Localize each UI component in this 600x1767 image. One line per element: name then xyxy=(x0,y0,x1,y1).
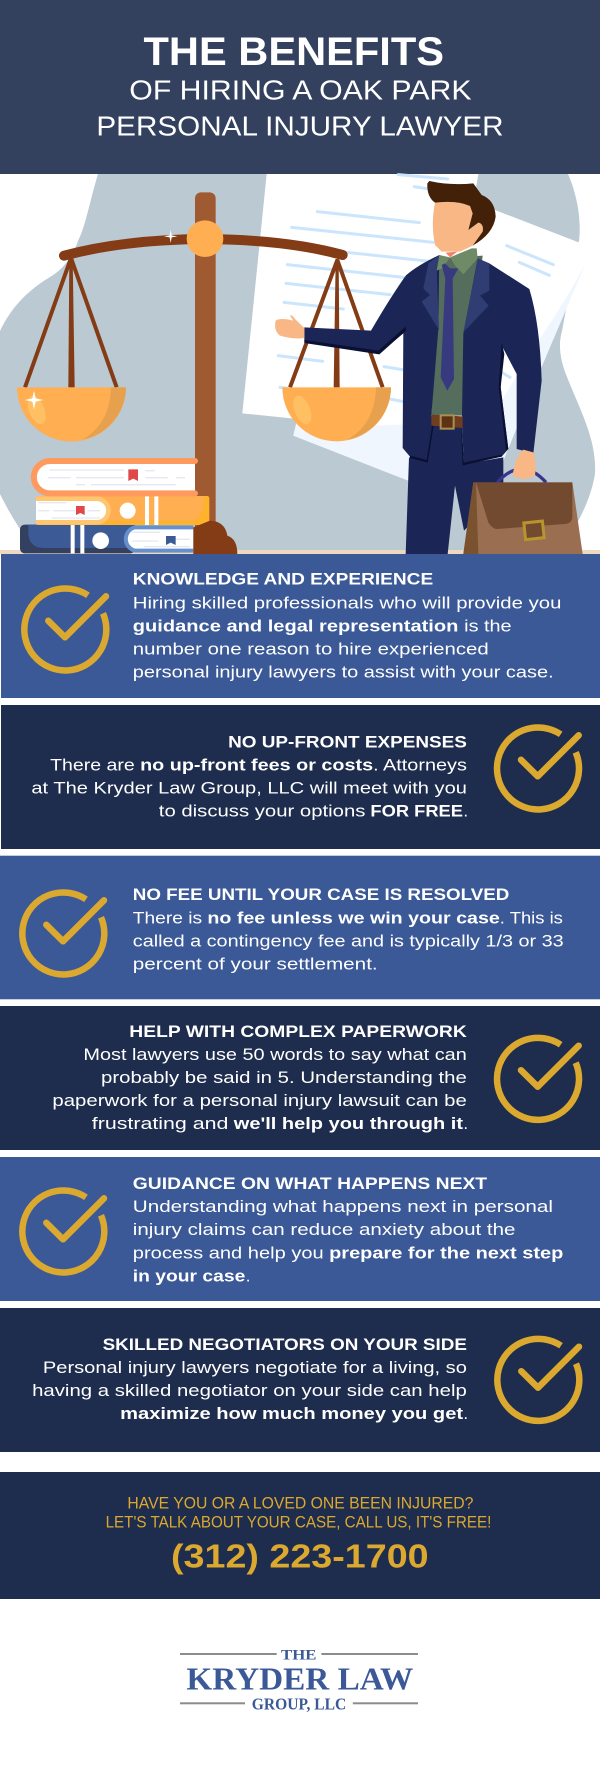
scale beam xyxy=(64,239,343,256)
heading: NO UP-FRONT EXPENSES xyxy=(228,732,467,751)
panel: skilled negotiators xyxy=(0,1308,600,1452)
text block: Hiring skilled professionals who will provide you xyxy=(133,593,561,612)
icon: check xyxy=(497,1038,579,1120)
text block xyxy=(133,908,564,973)
scale and books xyxy=(17,192,343,554)
documents and man xyxy=(242,174,592,554)
man: jacket xyxy=(304,255,542,465)
man: collar xyxy=(437,248,478,274)
text block: no fee unless we win your case xyxy=(207,908,500,927)
title: THE BENEFITS xyxy=(144,30,444,74)
text block: Understanding what happens next in personal xyxy=(133,1197,553,1216)
scale pole xyxy=(195,192,216,539)
panel: no fee until resolved xyxy=(0,856,600,999)
text block: . xyxy=(246,1266,250,1285)
phone number: (312) 223-1700 xyxy=(171,1537,429,1574)
text block: . This is xyxy=(500,908,563,927)
text block: prepare for the next step xyxy=(329,1243,563,1262)
man: trousers xyxy=(406,426,503,554)
text block xyxy=(31,755,468,820)
panel: guidance on what happens next xyxy=(0,1157,600,1301)
text block: process and help you xyxy=(133,1243,324,1262)
panel: no up-front expenses xyxy=(1,705,600,849)
logo: The Kryder Law Group, LLC: KRYDER LAW xyxy=(186,1660,413,1696)
right pan of scale xyxy=(282,259,391,441)
text block: injury claims can reduce anxiety about the xyxy=(133,1220,516,1239)
icon: check xyxy=(24,588,106,670)
text block: is the xyxy=(464,616,512,635)
call to action text: HAVE YOU OR A LOVED ONE BEEN INJURED? xyxy=(127,1494,473,1512)
briefcase xyxy=(463,482,583,554)
man: lower hand xyxy=(513,450,536,479)
paper sheets xyxy=(242,174,592,481)
text block xyxy=(133,593,561,681)
text block: There is xyxy=(133,908,202,927)
heading: NO FEE UNTIL YOUR CASE IS RESOLVED xyxy=(133,885,509,904)
text block: FOR FREE xyxy=(370,801,463,820)
book: bottom xyxy=(20,525,193,553)
text block: frustrating and xyxy=(92,1114,228,1133)
panel: knowledge and experience xyxy=(1,554,600,698)
call to action panel xyxy=(0,1472,600,1599)
text block: percent of your settlement. xyxy=(133,954,378,973)
left pan of scale xyxy=(17,258,126,441)
logo: The Kryder Law Group, LLC xyxy=(180,1648,418,1713)
book: middle xyxy=(36,496,209,525)
header banner xyxy=(0,0,600,174)
icon: check xyxy=(22,892,104,974)
text block xyxy=(32,1358,468,1423)
heading: KNOWLEDGE AND EXPERIENCE xyxy=(133,570,433,589)
panel: help with complex paperwork xyxy=(0,1006,600,1150)
text block: . Attorneys xyxy=(373,755,467,774)
sparkles xyxy=(25,230,177,409)
man: tie xyxy=(441,263,458,391)
text block: probably be said in 5. Understanding the xyxy=(101,1068,467,1087)
man: outstretched hand xyxy=(275,315,304,338)
paper text lines xyxy=(278,175,553,402)
background blob xyxy=(0,174,595,550)
text block xyxy=(133,1197,563,1285)
text block: . xyxy=(463,801,468,820)
icon: check xyxy=(497,727,579,809)
logo: The Kryder Law Group, LLC: THE xyxy=(281,1648,316,1664)
text block: called a contingency fee and is typically 1/3 or 33 xyxy=(133,931,564,950)
icon: check xyxy=(497,1339,579,1421)
subtitle line 2: PERSONAL INJURY LAWYER xyxy=(96,111,504,142)
heading: GUIDANCE ON WHAT HAPPENS NEXT xyxy=(133,1174,488,1193)
text block: no up-front fees or costs xyxy=(140,755,373,774)
logo: The Kryder Law Group, LLC: GROUP, LLC xyxy=(252,1694,346,1713)
text block: . xyxy=(463,1114,468,1133)
call to action text xyxy=(106,1494,491,1531)
heading: SKILLED NEGOTIATORS ON YOUR SIDE xyxy=(103,1335,467,1354)
icon: check xyxy=(22,1190,104,1272)
man: head xyxy=(427,181,496,257)
text block: . xyxy=(463,1404,468,1423)
call to action text: LET'S TALK ABOUT YOUR CASE, CALL US, IT'S FREE! xyxy=(106,1513,491,1531)
text block: guidance and legal representation xyxy=(133,616,458,635)
scale center pivot xyxy=(187,220,223,257)
floor strip xyxy=(0,550,600,554)
man: lapels xyxy=(422,255,489,332)
book: top xyxy=(34,461,195,493)
illustration: lawyer with scales of justice xyxy=(0,174,600,554)
text block: maximize how much money you get xyxy=(120,1404,463,1423)
text block: at The Kryder Law Group, LLC will meet with you xyxy=(31,778,467,797)
text block: we'll help you through it xyxy=(233,1114,463,1133)
text block: personal injury lawyers to assist with your case. xyxy=(133,662,554,681)
man: belt xyxy=(431,415,463,429)
text block: in your case xyxy=(133,1266,245,1285)
man: shirt xyxy=(431,256,483,416)
text block: number one reason to hire experienced xyxy=(133,639,489,658)
text block: to discuss your options xyxy=(159,801,365,820)
scale base xyxy=(193,521,237,554)
text block: There are xyxy=(50,755,135,774)
text block xyxy=(52,1045,468,1133)
briefcase handle xyxy=(497,469,546,482)
subtitle line 1: OF HIRING A OAK PARK xyxy=(129,74,472,105)
text block: Personal injury lawyers negotiate for a living, so xyxy=(43,1358,467,1377)
text block: Most lawyers use 50 words to say what can xyxy=(83,1045,467,1064)
text block: having a skilled negotiator on your side can help xyxy=(32,1381,467,1400)
heading: HELP WITH COMPLEX PAPERWORK xyxy=(129,1022,468,1041)
text block: paperwork for a personal injury lawsuit can be xyxy=(52,1091,467,1110)
